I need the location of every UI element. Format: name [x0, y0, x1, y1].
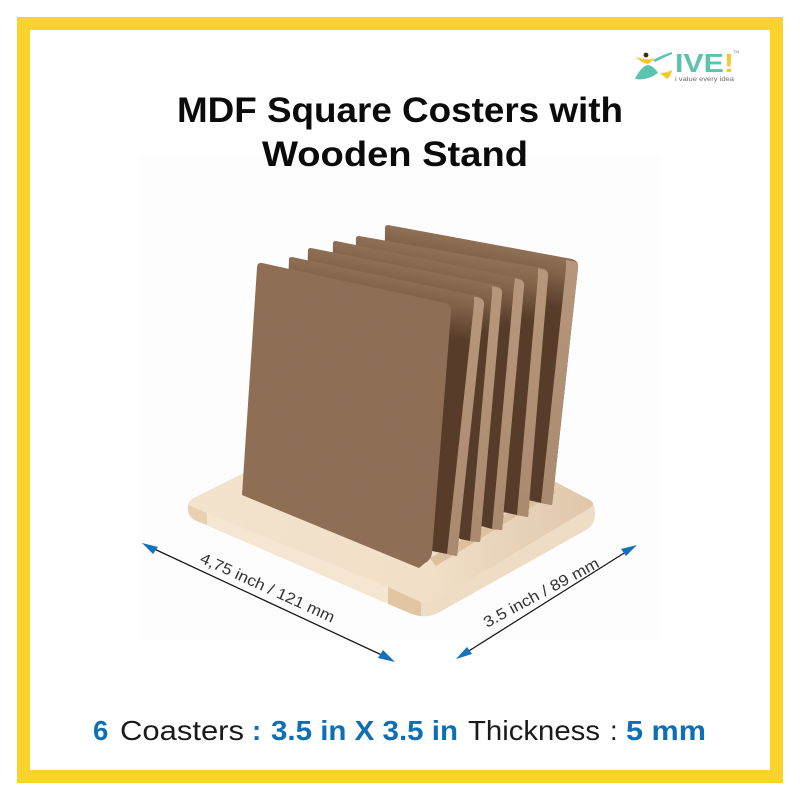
specification line: :	[610, 715, 618, 746]
logo wordmark: IVE !	[675, 48, 734, 78]
arrowhead right	[378, 650, 395, 662]
specification line: :	[252, 715, 261, 746]
edge strip	[541, 260, 578, 505]
title: MDF Square Costers with	[177, 91, 623, 130]
product photo background	[141, 155, 659, 640]
dimension: 3.5 inch depth arrow	[456, 545, 637, 659]
title: Wooden Stand	[262, 135, 528, 174]
logo: IVE!	[635, 48, 739, 83]
edge strip	[447, 297, 484, 556]
coaster 6	[384, 225, 578, 505]
logo icon	[635, 52, 672, 79]
wooden stand	[188, 400, 595, 616]
specification line: Thickness	[468, 715, 600, 746]
coaster 5	[354, 236, 548, 517]
specification line: 5 mm	[626, 715, 706, 746]
dimension label: 4,75 inch / 121 mm	[197, 550, 337, 626]
arrowhead right	[621, 545, 637, 556]
specification line: Coasters	[120, 715, 244, 746]
edge strip	[517, 268, 548, 517]
title	[177, 91, 623, 174]
specification line: 6	[93, 715, 108, 746]
arrowhead left	[456, 647, 472, 659]
dimension: 4.75 inch width arrow	[142, 543, 395, 662]
arrowhead left	[142, 543, 158, 554]
specification line: 3.5 in X 3.5 in	[271, 715, 458, 746]
logo tagline: i value every idea	[675, 76, 734, 83]
edge strip	[492, 278, 524, 530]
coaster 2	[286, 257, 484, 556]
logo trademark: TM	[733, 49, 739, 54]
specification line	[93, 715, 706, 746]
coaster 4	[331, 241, 524, 530]
dimension label: 3.5 inch / 89 mm	[481, 555, 602, 632]
edge strip	[470, 286, 502, 542]
coaster 3	[305, 248, 502, 542]
product illustration: coasters on wooden stand	[188, 225, 595, 616]
coaster 1: front face	[242, 263, 451, 568]
